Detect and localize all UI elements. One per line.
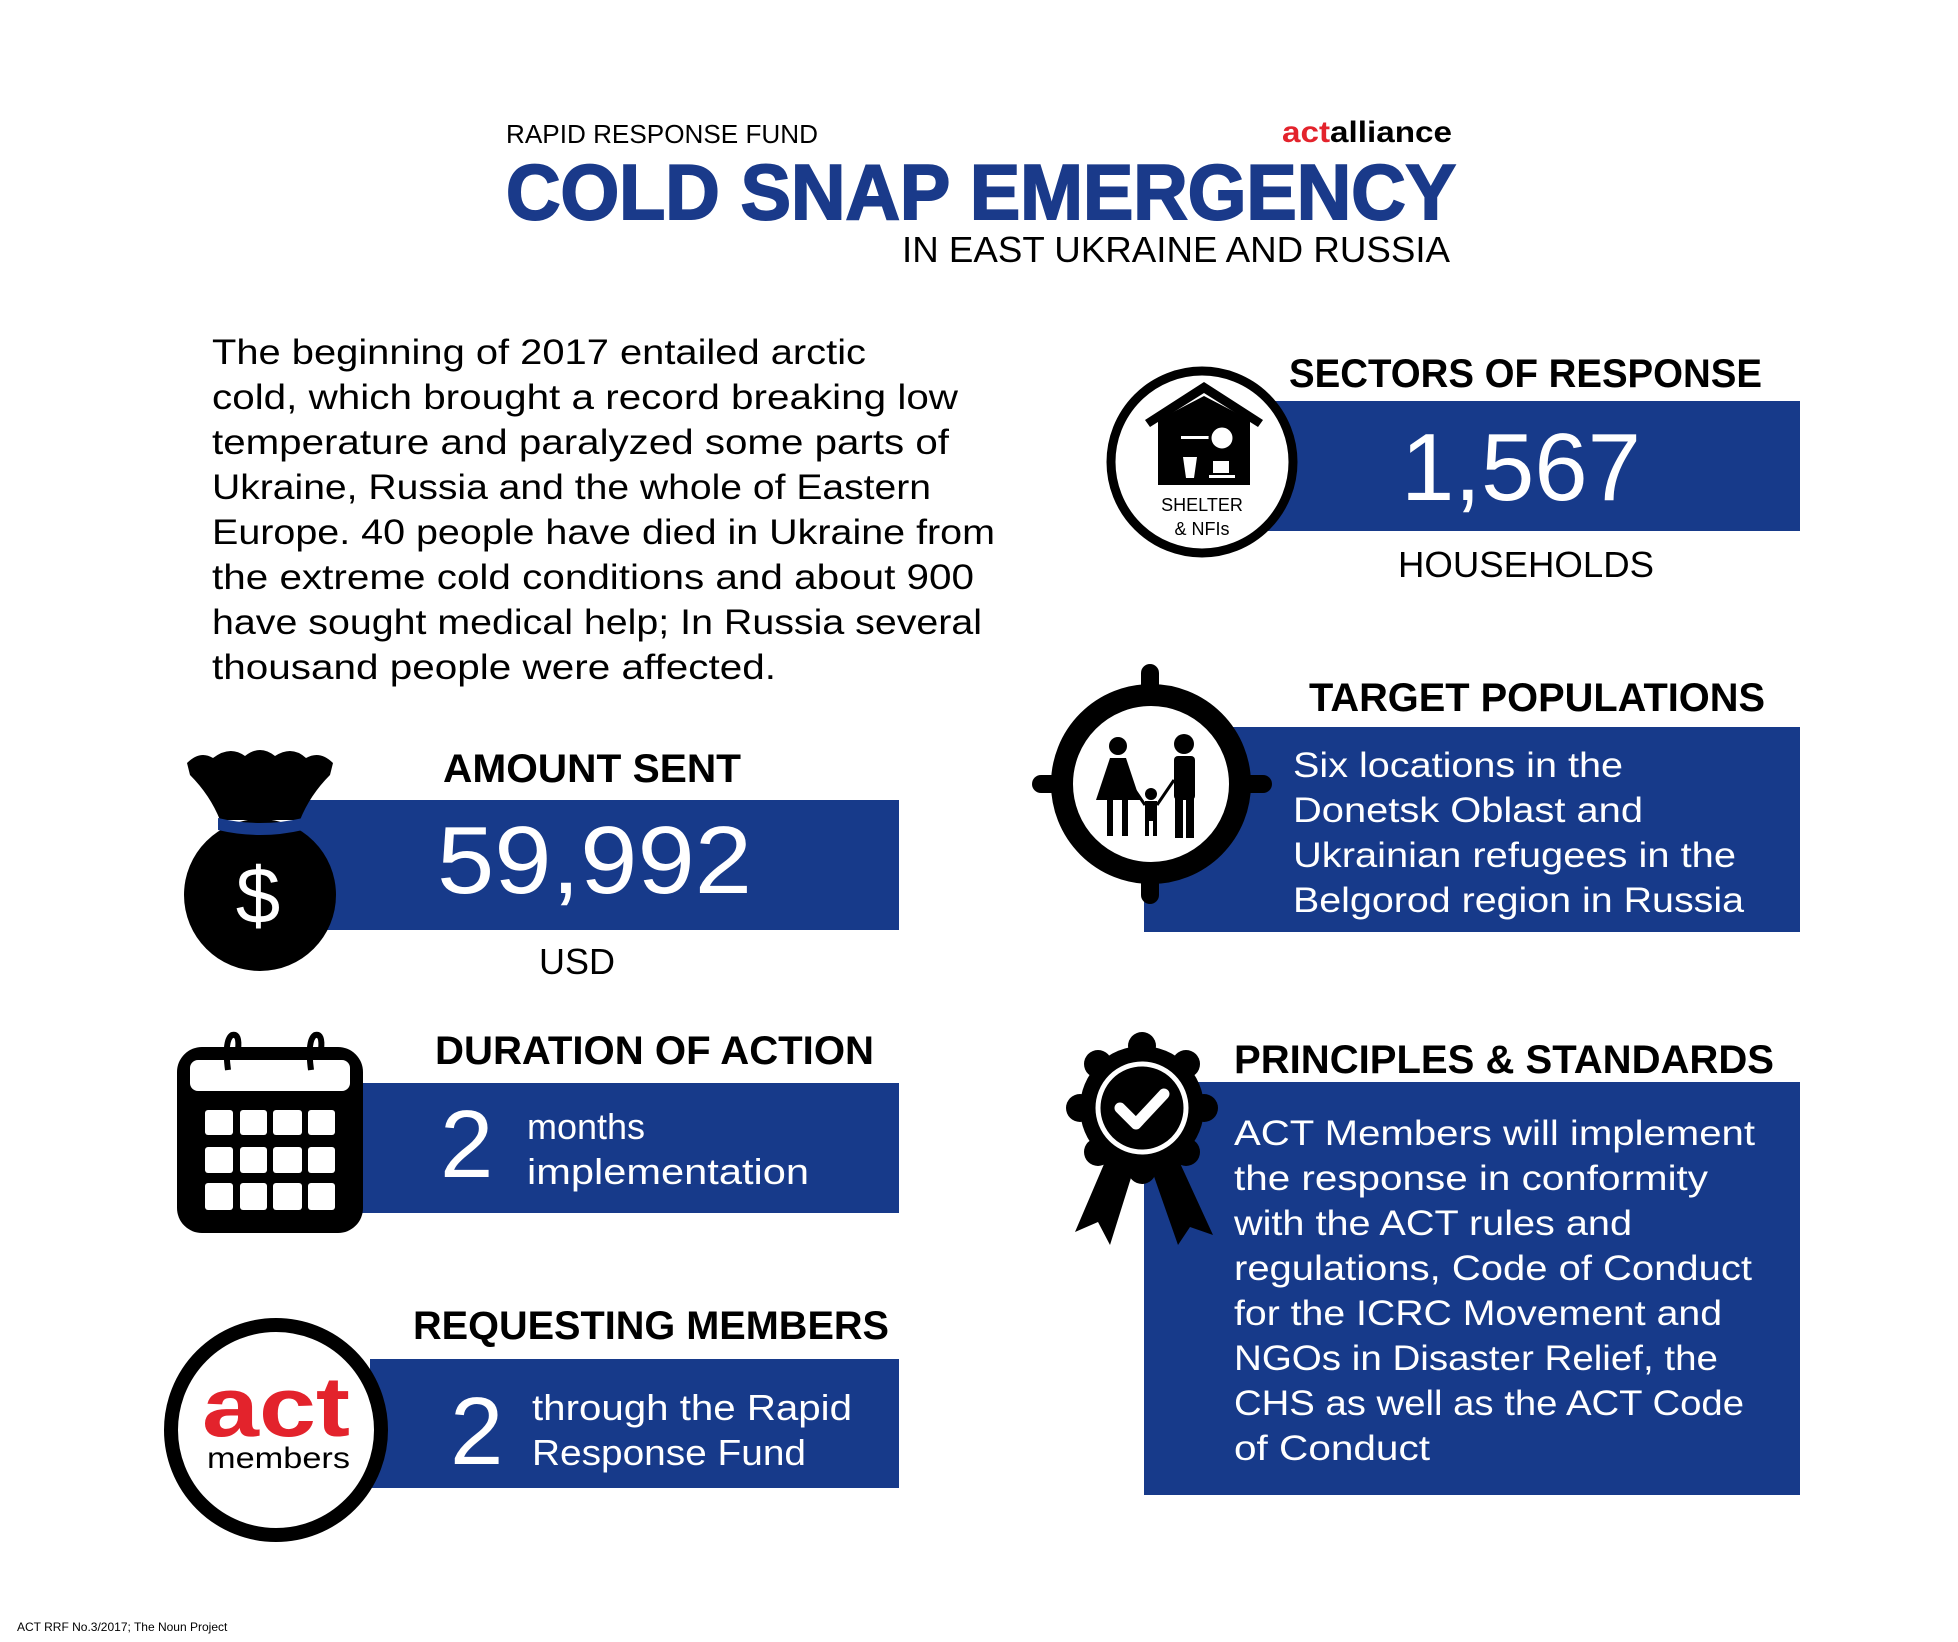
- panel: requesting members: [171, 1304, 899, 1535]
- panel: principles and standards: regulations, Code of Conduct: [1234, 1249, 1752, 1288]
- panel: principles and standards: of Conduct: [1234, 1429, 1430, 1468]
- panel: requesting members: REQUESTING MEMBERS: [413, 1304, 889, 1348]
- title: COLD SNAP EMERGENCY: [506, 148, 1456, 236]
- intro paragraph: cold, which brought a record breaking low: [212, 378, 959, 417]
- panel: sectors of response: [1111, 352, 1800, 585]
- panel: amount sent: USD: [539, 941, 615, 982]
- panel: target populations: TARGET POPULATIONS: [1309, 676, 1765, 720]
- panel: duration of action: 2: [440, 1091, 493, 1198]
- panel: principles and standards: ACT Members will implement: [1234, 1114, 1755, 1153]
- panel: target populations: Belgorod region in Russia: [1293, 881, 1745, 920]
- panel: sectors of response: SECTORS OF RESPONSE: [1289, 352, 1762, 396]
- panel: duration of action: implementation: [527, 1151, 809, 1192]
- panel: requesting members: 2: [450, 1378, 503, 1485]
- panel: amount sent: 59,992: [437, 807, 752, 914]
- panel: principles and standards: for the ICRC Movement and: [1234, 1294, 1722, 1333]
- icon: act members logo: [171, 1325, 381, 1535]
- logo: actalliance: actalliance: [1282, 116, 1452, 149]
- panel: principles and standards: PRINCIPLES & STANDARDS: [1234, 1038, 1774, 1082]
- panel: duration of action: [177, 1029, 899, 1233]
- panel: duration of action: DURATION OF ACTION: [435, 1029, 874, 1073]
- intro paragraph: [212, 333, 995, 687]
- icon: shelter house: & NFIs: [1174, 519, 1230, 539]
- panel: target populations: Ukrainian refugees in the: [1293, 836, 1736, 875]
- panel: requesting members: through the Rapid: [532, 1387, 852, 1428]
- panel: sectors of response: 1,567: [1401, 414, 1641, 521]
- panel: principles and standards: CHS as well as the ACT Code: [1234, 1384, 1744, 1423]
- subtitle: IN EAST UKRAINE AND RUSSIA: [902, 229, 1450, 270]
- panel: amount sent: AMOUNT SENT: [443, 747, 741, 791]
- icon: act members logo: members: [207, 1442, 350, 1475]
- intro paragraph: have sought medical help; In Russia several: [212, 603, 982, 642]
- header: rapid response fund: RAPID RESPONSE FUND: [506, 119, 818, 149]
- panel: principles and standards: with the ACT rules and: [1233, 1204, 1632, 1243]
- icon: calendar: [177, 1035, 363, 1233]
- icon: award ribbon: [1066, 1032, 1218, 1245]
- icon: family target: [1032, 664, 1272, 904]
- footer credit: ACT RRF No.3/2017; The Noun Project: [17, 1620, 228, 1634]
- panel: sectors of response: HOUSEHOLDS: [1398, 544, 1654, 585]
- intro paragraph: thousand people were affected.: [212, 648, 776, 687]
- panel: principles and standards: [1066, 1032, 1800, 1495]
- panel: principles and standards: NGOs in Disaster Relief, the: [1234, 1339, 1718, 1378]
- intro paragraph: temperature and paralyzed some parts of: [212, 423, 949, 462]
- icon: act members logo: act: [202, 1360, 350, 1454]
- panel: requesting members: Response Fund: [532, 1432, 806, 1473]
- panel: target populations: [1032, 664, 1800, 932]
- icon: shelter house: [1111, 371, 1293, 553]
- panel: principles and standards: the response in conformity: [1234, 1159, 1709, 1198]
- intro paragraph: Europe. 40 people have died in Ukraine from: [212, 513, 995, 552]
- icon: shelter house: SHELTER: [1161, 495, 1243, 515]
- intro paragraph: Ukraine, Russia and the whole of Eastern: [212, 468, 931, 507]
- icon: money bag: $: [236, 851, 280, 940]
- panel: duration of action: months: [527, 1106, 645, 1147]
- panel: amount sent: [184, 747, 899, 982]
- panel: target populations: Donetsk Oblast and: [1293, 791, 1643, 830]
- icon: money bag: [184, 750, 336, 971]
- intro paragraph: the extreme cold conditions and about 900: [212, 558, 974, 597]
- intro paragraph: The beginning of 2017 entailed arctic: [212, 333, 866, 372]
- panel: target populations: Six locations in the: [1293, 746, 1623, 785]
